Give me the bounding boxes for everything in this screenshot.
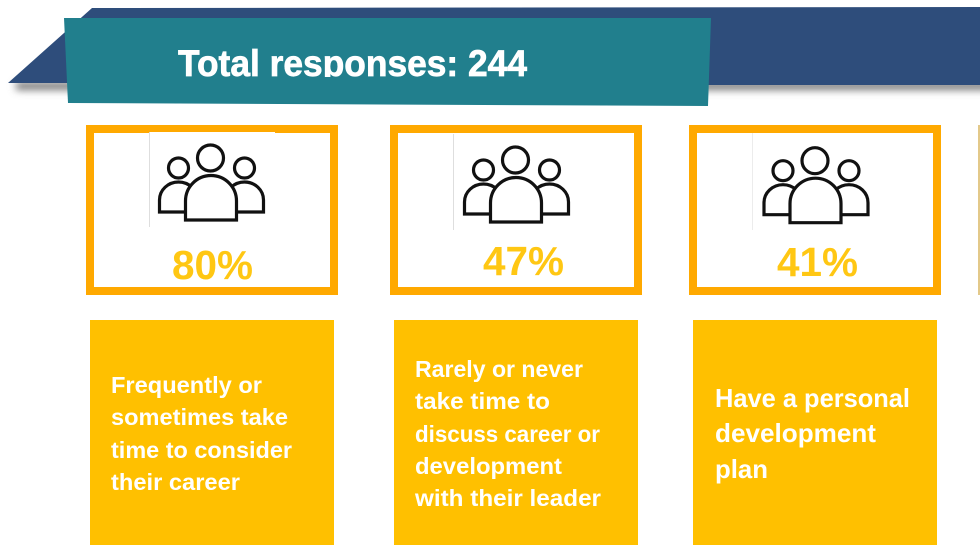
next panel edge bbox=[978, 125, 980, 295]
icon: group of people bbox=[464, 147, 568, 222]
percentage: 47% bbox=[483, 238, 564, 284]
panel: career consideration description bbox=[90, 320, 334, 545]
panel: 41% stat bbox=[693, 129, 937, 291]
panel: leader discussion description: Rarely or never bbox=[415, 356, 583, 382]
percentage: 80% bbox=[172, 242, 253, 288]
panel: career consideration description: their career bbox=[111, 469, 240, 495]
panel: development plan description: development bbox=[715, 418, 876, 448]
banner: teal heading panel bbox=[64, 18, 711, 106]
panel: career consideration description: sometimes take bbox=[111, 404, 288, 430]
panel: development plan description: plan bbox=[715, 454, 768, 484]
panel: 47% stat bbox=[394, 129, 638, 291]
panel: development plan description bbox=[693, 320, 937, 545]
banner: navy ribbon bbox=[8, 7, 980, 90]
panel: leader discussion description bbox=[394, 320, 638, 545]
icon: group of people bbox=[764, 148, 868, 223]
title: Total responses: 244 bbox=[178, 43, 527, 84]
panel: leader discussion description: with their leader bbox=[414, 485, 601, 511]
panel: career consideration description: Frequently or bbox=[111, 372, 262, 398]
panel: leader discussion description: take time to bbox=[415, 388, 550, 414]
panel: leader discussion description: discuss career or bbox=[415, 421, 600, 447]
panel: development plan description: Have a personal bbox=[715, 383, 910, 413]
panel: leader discussion description: development bbox=[415, 453, 562, 479]
icon: group of people bbox=[160, 145, 264, 220]
percentage: 41% bbox=[777, 239, 858, 285]
panel: 80% stat bbox=[90, 129, 334, 291]
panel: career consideration description: time to consider bbox=[111, 437, 292, 463]
